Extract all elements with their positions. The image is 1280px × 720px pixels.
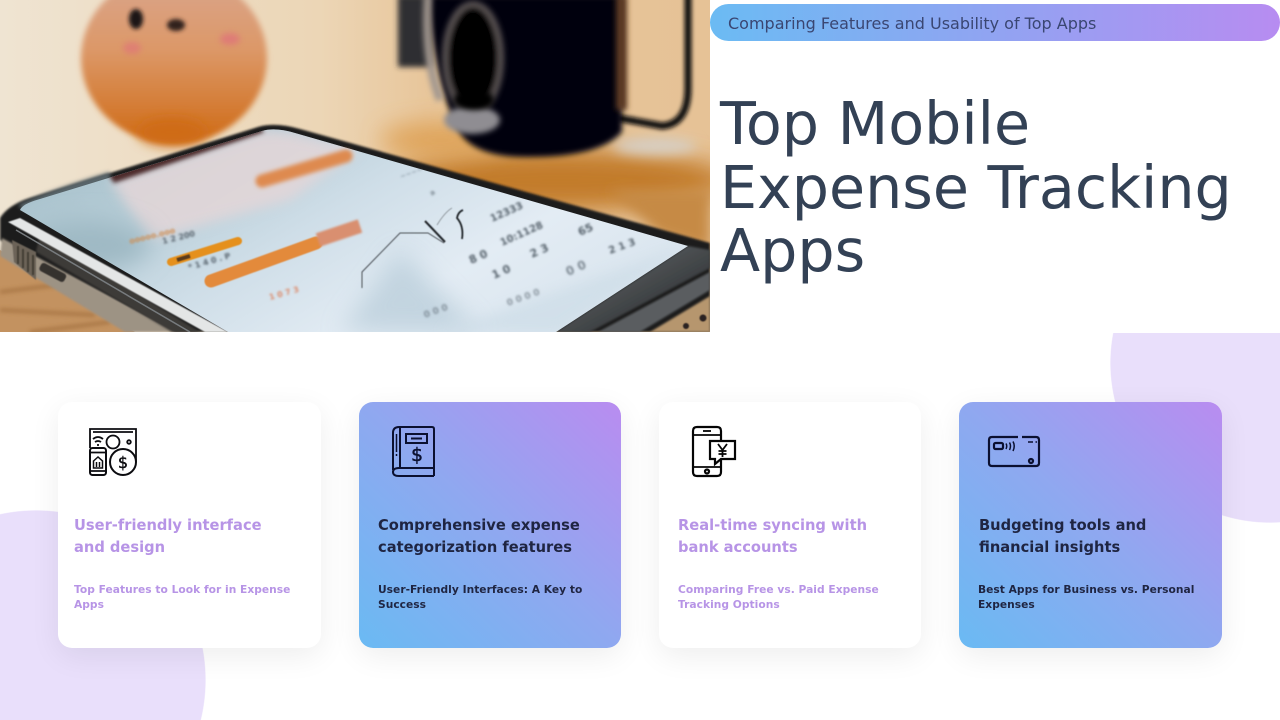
- title: Apps: [720, 217, 865, 285]
- card subtext: Best Apps for Business vs. Personal Expenses: [978, 583, 1194, 611]
- card subtext: User-Friendly Interfaces: A Key to Success: [378, 583, 582, 611]
- icon: cash, phone and coin: $: [118, 453, 128, 472]
- blurred figures on screen: 1 0: [490, 262, 513, 282]
- icon: cash, phone and coin: [89, 428, 137, 476]
- blurred figures on screen: 1 2 200: [161, 229, 196, 246]
- blurred figures on screen: 10:1128: [499, 220, 545, 249]
- card heading: Budgeting tools and financial insights: [979, 517, 1146, 556]
- chart line on screen: [362, 208, 463, 288]
- blurred figures on screen: 0 0: [564, 257, 588, 279]
- header pill: Comparing Features and Usability of Top Apps: [728, 14, 1096, 33]
- card subtext: Top Features to Look for in Expense Apps: [74, 583, 290, 611]
- header pill: [710, 4, 1280, 41]
- icon: phone with yen message: [692, 426, 736, 478]
- title: Top Mobile: [720, 90, 1030, 158]
- blurred figures on screen: 1 0 7 3: [268, 285, 300, 302]
- card heading: Real-time syncing with bank accounts: [678, 517, 867, 556]
- card heading: User-friendly interface and design: [74, 517, 262, 556]
- decorative circle: top right: [1110, 333, 1280, 523]
- blurred figures on screen: 12333: [489, 201, 525, 225]
- title: [720, 90, 1232, 285]
- icon: ledger book with dollar: $: [411, 444, 423, 466]
- orange bars on screen: [171, 156, 360, 281]
- blurred figures on screen: a: [428, 188, 437, 198]
- blurred figures on screen: * 1 4 0 . P: [187, 251, 232, 272]
- panel: card 3: [659, 402, 921, 648]
- panel: card 2: [359, 402, 621, 648]
- blurred figures on screen: 2 3: [528, 241, 551, 261]
- egg character: [81, 0, 267, 146]
- blurred figures on screen: 0 0 0: [423, 303, 450, 321]
- decorative circle: bottom left: [0, 510, 206, 720]
- icon: ledger book with dollar: [392, 426, 435, 477]
- blurred figures on screen: 65: [576, 221, 595, 239]
- icon: contactless card: [988, 436, 1040, 468]
- blurred figures on screen: 8 0: [467, 247, 490, 267]
- blurred figures on screen: [128, 165, 637, 321]
- blurred figures on screen: ooooo.ooo: [128, 226, 177, 246]
- panel: card 1: [58, 402, 321, 648]
- blurred figures on screen: ~~~~: [399, 165, 424, 181]
- phone screen: [0, 120, 710, 332]
- panel: card 4: [959, 402, 1222, 648]
- card heading: Comprehensive expense categorization features: [378, 517, 580, 556]
- phone body: [0, 125, 710, 332]
- coffee mug: [398, 0, 688, 157]
- title: Expense Tracking: [720, 154, 1232, 222]
- blurred figures on screen: 0 0 0 0: [506, 288, 541, 309]
- card subtext: Comparing Free vs. Paid Expense Tracking Options: [678, 583, 879, 611]
- blurred figures on screen: 2 1 3: [607, 237, 637, 257]
- table and backdrop: [0, 0, 730, 332]
- photo: phone with expense app on wooden table: [0, 0, 710, 332]
